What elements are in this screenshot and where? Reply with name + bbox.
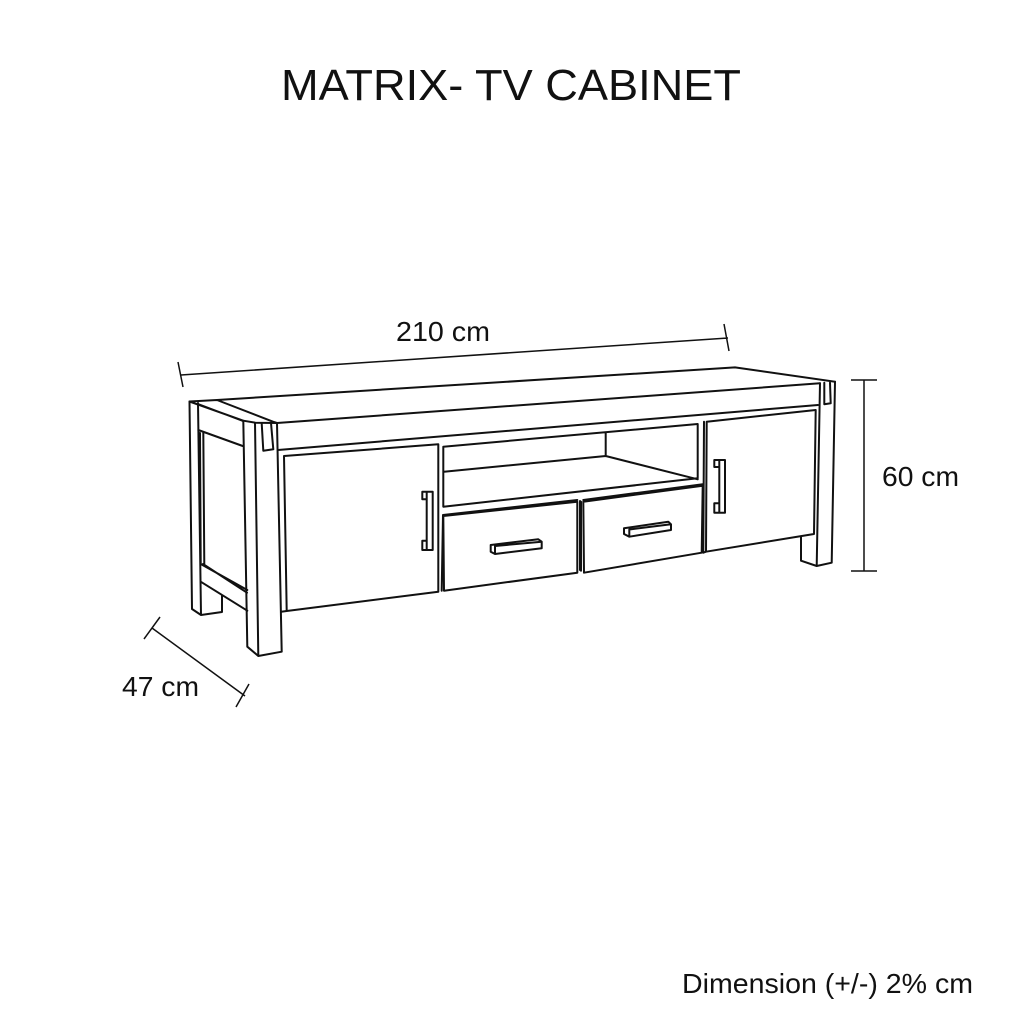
open shelf bbox=[443, 424, 698, 507]
left drawer bbox=[442, 500, 580, 591]
left side frame bbox=[190, 402, 247, 615]
right door handle bbox=[714, 460, 725, 513]
right leg bbox=[801, 382, 835, 566]
dimension: height 60 cm bbox=[851, 380, 959, 571]
dimension: height 60 cm: 60 cm bbox=[882, 461, 959, 492]
left drawer handle bbox=[491, 539, 542, 554]
right drawer handle bbox=[624, 522, 671, 537]
front left leg bbox=[243, 421, 282, 656]
dimension: depth 47 cm: 47 cm bbox=[122, 671, 199, 702]
right door bbox=[703, 410, 816, 553]
title: MATRIX- TV CABINET bbox=[281, 61, 741, 110]
dimension: width 210 cm: 210 cm bbox=[396, 316, 490, 347]
footnote: Dimension (+/-) 2% cm bbox=[682, 968, 973, 999]
cabinet top surface bbox=[190, 367, 835, 423]
TV cabinet line drawing bbox=[190, 367, 835, 656]
left door handle bbox=[422, 492, 433, 550]
right drawer bbox=[581, 484, 703, 573]
dimension: width 210 cm bbox=[178, 316, 729, 387]
front apron bbox=[278, 405, 818, 450]
dimension: depth 47 cm bbox=[122, 617, 249, 707]
left door bbox=[281, 444, 438, 612]
